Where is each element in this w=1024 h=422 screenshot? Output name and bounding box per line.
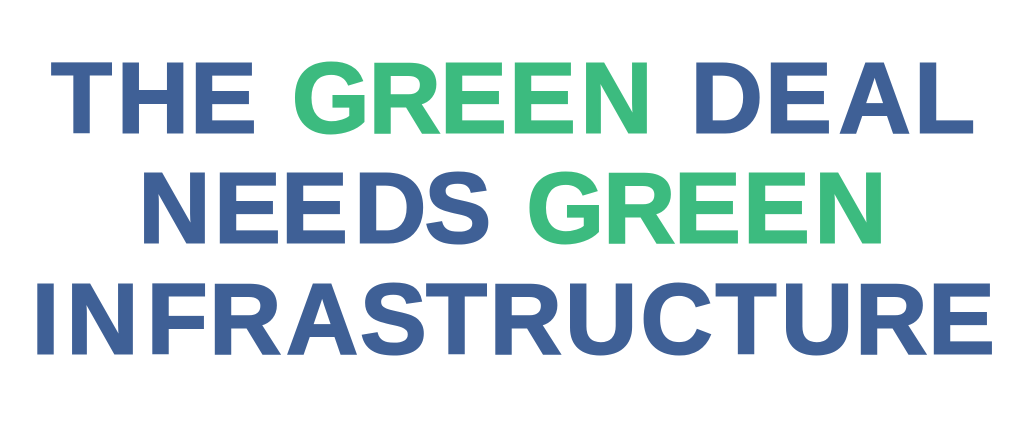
- line 1: THE GREEN DEAL: GREEN: [292, 42, 653, 154]
- line 1: THE GREEN DEAL: DEAL: [691, 42, 975, 154]
- line 2: NEEDS GREEN: GREEN: [526, 152, 887, 264]
- line 2: NEEDS GREEN: NEEDS: [138, 152, 491, 264]
- line 1: THE GREEN DEAL: [51, 42, 975, 154]
- line 1: THE GREEN DEAL: THE: [51, 42, 257, 154]
- line 2: NEEDS GREEN: [138, 152, 887, 264]
- line 3: INFRASTRUCTURE: INFRASTRUCTURE: [32, 264, 995, 376]
